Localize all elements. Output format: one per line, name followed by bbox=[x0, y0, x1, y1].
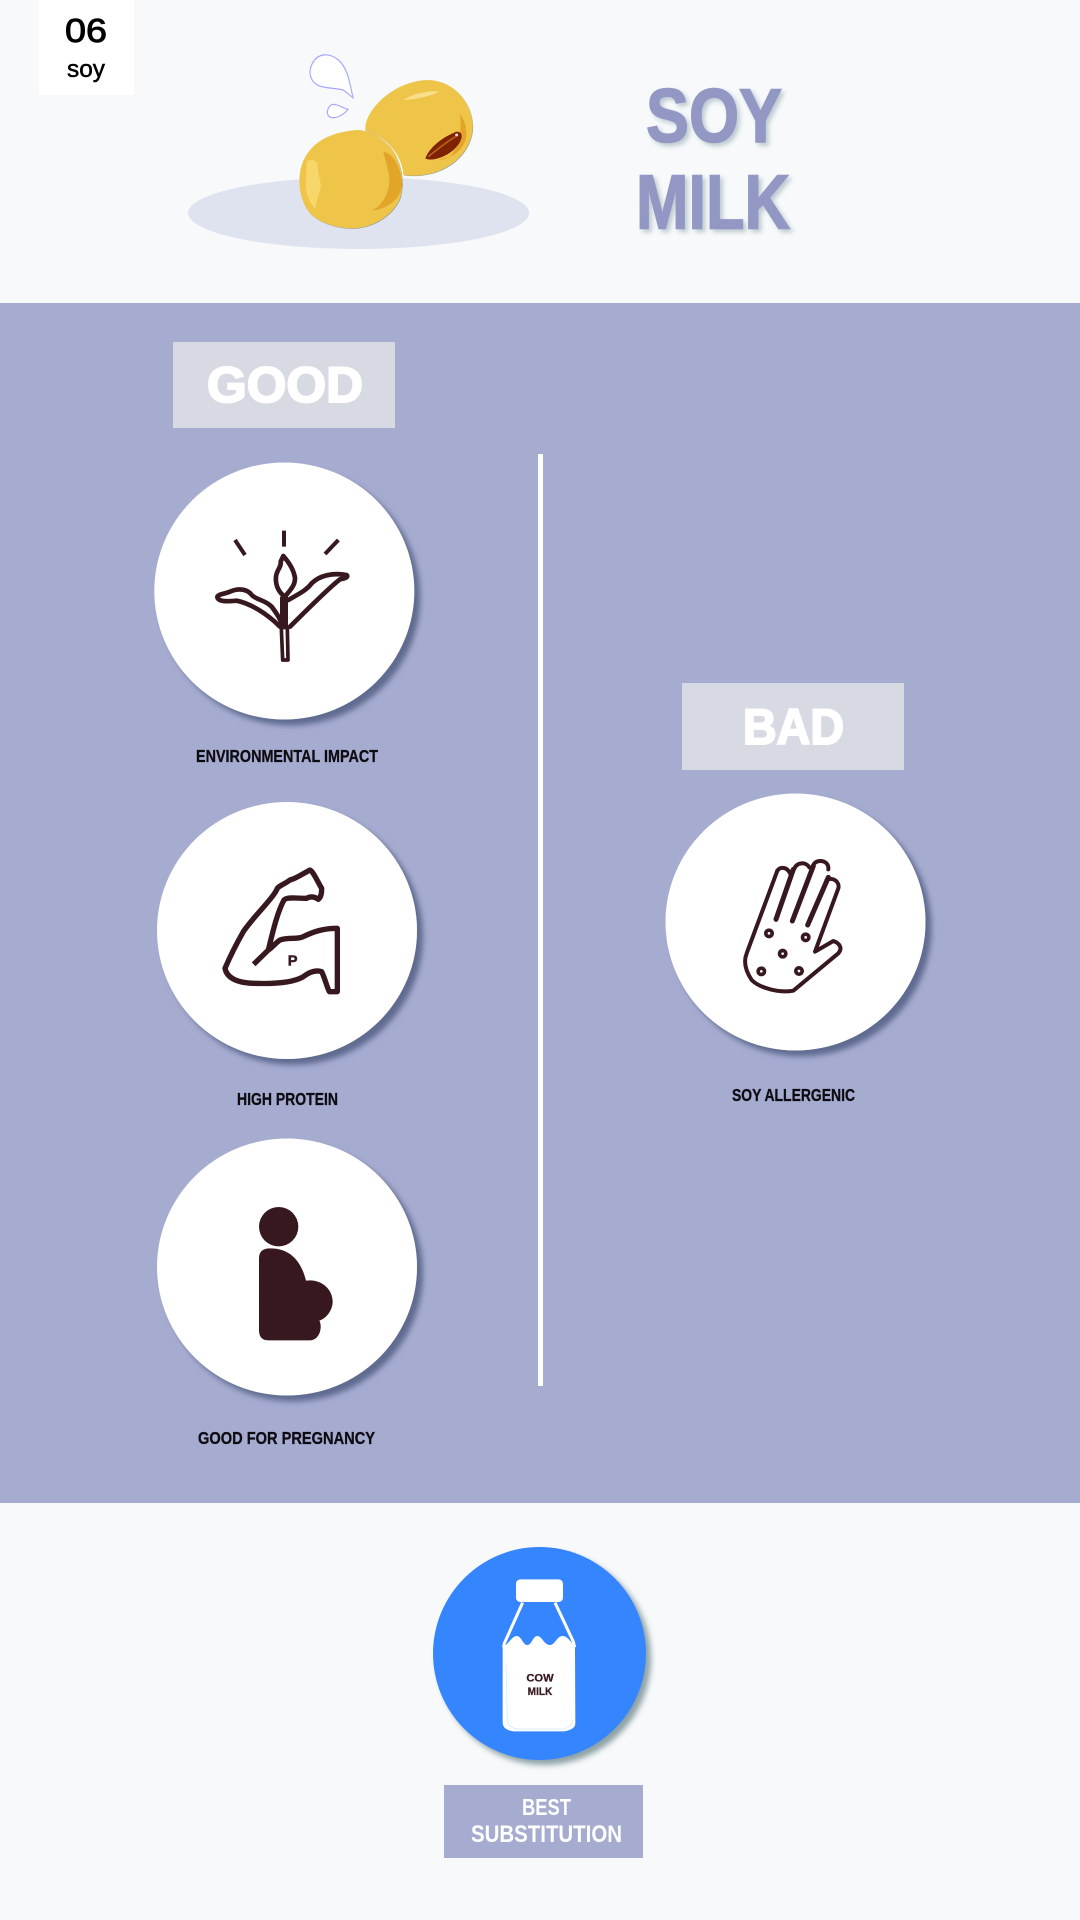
letter P: P bbox=[288, 953, 298, 969]
circle bbox=[666, 794, 926, 1050]
soybeans and droplets bbox=[299, 55, 473, 228]
badge word: soy bbox=[67, 56, 105, 83]
label: HIGH PROTEIN bbox=[237, 1089, 338, 1109]
divider line bbox=[538, 454, 543, 1386]
circle bbox=[154, 462, 414, 720]
item: good for pregnancy bbox=[157, 1138, 417, 1448]
illustration: soybeans on plate bbox=[188, 55, 529, 249]
best substitution badge bbox=[433, 1547, 646, 1760]
icon: hand with rash bbox=[745, 861, 840, 991]
bad heading bbox=[682, 683, 904, 770]
rash dots bbox=[758, 930, 809, 974]
badge number: 06 bbox=[65, 12, 107, 49]
title bbox=[636, 74, 790, 246]
icon: pregnant figure bbox=[259, 1207, 333, 1340]
front bean bbox=[299, 130, 402, 228]
title line: soy: SOY bbox=[646, 74, 782, 159]
blue circle bbox=[433, 1547, 646, 1760]
label: SOY ALLERGENIC bbox=[732, 1085, 855, 1105]
back bean bbox=[365, 80, 473, 176]
plate shadow ellipse bbox=[188, 177, 529, 249]
circle bbox=[157, 802, 417, 1059]
icon: flexed arm bbox=[225, 870, 337, 992]
caption line two: SUBSTITUTION bbox=[471, 1821, 622, 1848]
good heading text: GOOD bbox=[207, 357, 363, 413]
item: soy allergenic bbox=[666, 794, 926, 1105]
circle bbox=[157, 1138, 417, 1396]
best substitution caption bbox=[444, 1785, 643, 1858]
droplet large bbox=[310, 55, 353, 98]
item: high protein bbox=[157, 802, 417, 1109]
item: environmental impact bbox=[154, 462, 414, 766]
label: GOOD FOR PREGNANCY bbox=[198, 1428, 375, 1448]
badge: 06 soy bbox=[39, 0, 134, 95]
panel: good and bad band bbox=[0, 303, 1080, 1503]
droplet small bbox=[327, 104, 348, 118]
icon: milk bottle bbox=[503, 1579, 575, 1731]
bottle label: MILK bbox=[528, 1686, 553, 1698]
bad heading text: BAD bbox=[743, 699, 844, 755]
label: ENVIRONMENTAL IMPACT bbox=[196, 746, 378, 766]
icon: plant bbox=[217, 531, 347, 660]
bottle label bbox=[526, 1672, 554, 1698]
bottle label: COW bbox=[526, 1672, 554, 1684]
good heading bbox=[173, 342, 395, 428]
caption line one: BEST bbox=[522, 1794, 571, 1820]
title line: milk: MILK bbox=[636, 160, 790, 246]
